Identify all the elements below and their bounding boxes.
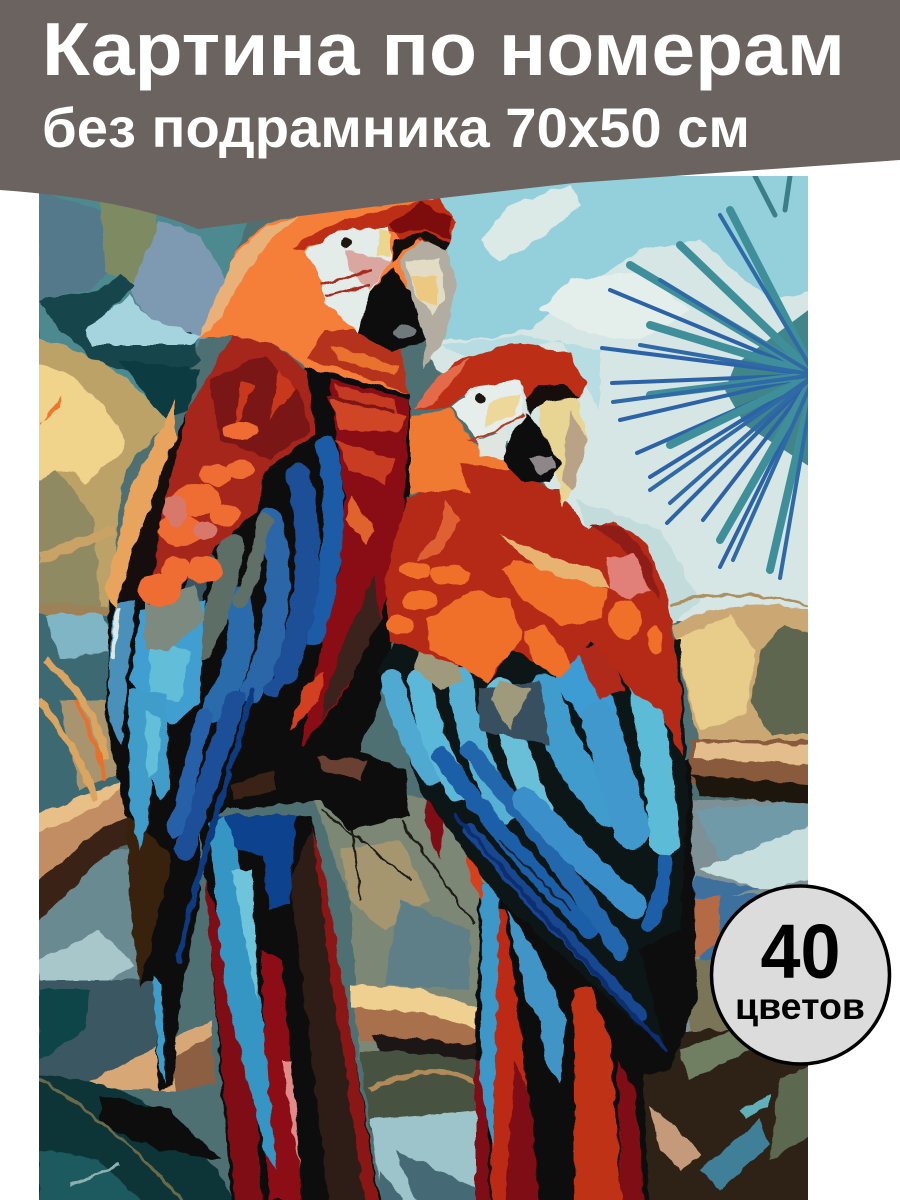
badge: 40 colours: 40 (760, 909, 840, 995)
left macaw blue wing (105, 413, 340, 960)
left macaw white face (306, 227, 392, 333)
painting background: sky and jungle (30, 170, 820, 1200)
badge: 40 colours: цветов (735, 986, 865, 1027)
left macaw beak (399, 240, 457, 370)
sky (430, 239, 808, 622)
left macaw tail (126, 815, 382, 1200)
right macaw white face (452, 380, 523, 440)
left macaw head (199, 198, 457, 393)
right macaw dark rear (639, 759, 698, 1075)
right macaw (378, 342, 697, 1200)
left macaw red shoulder (105, 337, 316, 610)
panel: parrot painting (30, 170, 820, 1200)
middle jungle (314, 795, 486, 1060)
upper left leaves (39, 194, 248, 401)
left macaw foot (230, 745, 410, 830)
right macaw red chest (385, 480, 682, 757)
lower left jungle (39, 600, 120, 813)
left macaw (105, 198, 457, 1200)
palm frond (602, 176, 815, 578)
right macaw beak (540, 397, 588, 507)
dark leaf bottom left (30, 1075, 232, 1200)
left macaw body (228, 368, 411, 808)
header ribbon (0, 0, 900, 229)
tree branches (30, 525, 820, 1090)
subtitle: без подрамника 70х50 см (42, 96, 750, 159)
right macaw tail (425, 785, 650, 1200)
right macaw blue wing (378, 640, 688, 1050)
badge: 40 colours (712, 886, 890, 1064)
lower right jungle (686, 799, 808, 1032)
right macaw head (410, 342, 590, 530)
title: Картина по номерам (42, 7, 845, 91)
tan palm domes (30, 337, 815, 745)
